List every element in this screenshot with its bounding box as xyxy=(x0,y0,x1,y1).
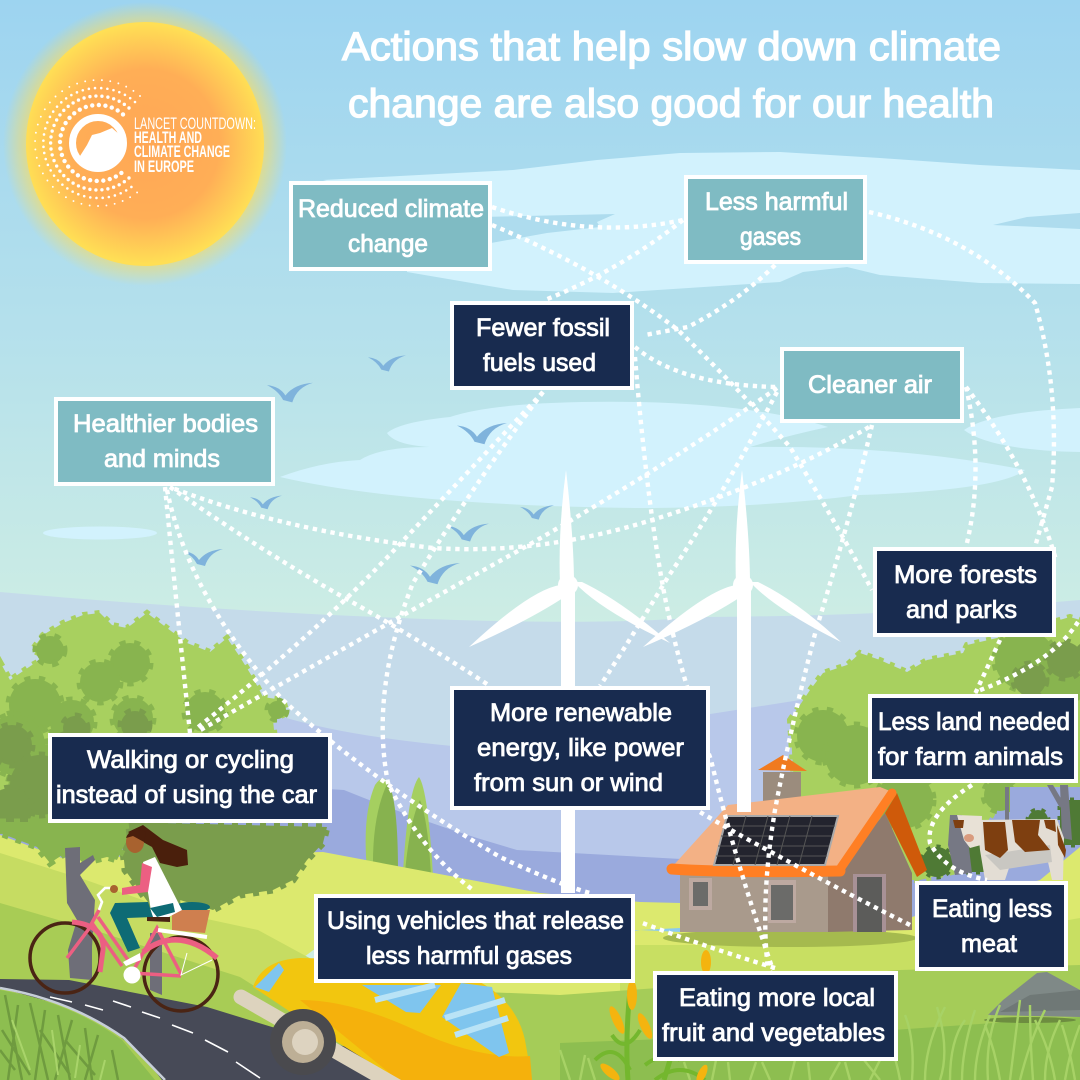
hills and fields xyxy=(0,835,1080,1080)
cypress trees xyxy=(366,777,433,876)
sky patches in the clouds xyxy=(480,213,1080,245)
box: Less harmful gases: Less harmful xyxy=(705,188,848,216)
logo text: CLIMATE CHANGE xyxy=(134,142,230,161)
basket xyxy=(158,902,210,937)
title xyxy=(342,25,1001,126)
wind turbine right xyxy=(643,470,841,812)
box: More renewable energy: More renewable xyxy=(490,699,672,727)
dotted connection network xyxy=(165,207,1078,970)
chimney xyxy=(758,755,807,805)
box: Eating less meat: meat xyxy=(961,930,1017,958)
bicycle xyxy=(30,888,218,1011)
box: Fewer fossil fuels used: fuels used xyxy=(483,349,596,377)
house xyxy=(663,755,927,947)
logo text xyxy=(134,114,256,176)
logo dot rings xyxy=(35,80,140,206)
box: Reduced climate change: Reduced climate xyxy=(298,195,484,223)
tree: right large xyxy=(790,617,1080,880)
box: Cleaner air: Cleaner air xyxy=(808,371,932,399)
box: Less land needed for farm animals: Less land needed xyxy=(878,708,1070,736)
box: Fewer fossil fuels used: Fewer fossil xyxy=(476,314,610,342)
sun xyxy=(3,2,287,286)
box: Less harmful gases xyxy=(686,177,865,262)
road xyxy=(0,979,470,1080)
logo text: IN EUROPE xyxy=(134,157,194,176)
box: Healthier bodies and minds: Healthier bodies xyxy=(73,410,258,438)
box: Less land needed for farm animals: for farm animals xyxy=(878,743,1063,771)
bottom right grass blades xyxy=(560,1000,1080,1080)
car wheel xyxy=(270,1009,336,1075)
box: Fewer fossil fuels used xyxy=(452,303,632,388)
logo text: LANCET COUNTDOWN: xyxy=(134,114,256,133)
car xyxy=(241,958,532,1080)
solar panel xyxy=(714,816,838,865)
box: Walking or cycling: instead of using the car xyxy=(56,781,317,809)
box: Eating less meat: Eating less xyxy=(932,895,1052,923)
box: Eating more local: Eating more local xyxy=(679,984,875,1012)
title: Actions that help slow down climate xyxy=(342,25,1001,69)
wind turbine left xyxy=(469,470,670,893)
title: change are also good for our health xyxy=(348,82,994,126)
tree trunks right xyxy=(948,785,1072,875)
box: Eating more local xyxy=(655,973,896,1059)
box: More forests and parks xyxy=(875,549,1054,635)
box: Less land needed for farm animals xyxy=(870,696,1076,781)
walls xyxy=(680,870,830,932)
box: Cleaner air xyxy=(782,349,962,421)
cow xyxy=(953,815,1066,880)
corn plant xyxy=(595,950,711,1080)
grass under the road xyxy=(0,990,155,1080)
distant mountains xyxy=(0,592,1080,920)
rock xyxy=(984,972,1080,1023)
box: Walking or cycling: Walking or cycling xyxy=(87,746,294,774)
box: Healthier bodies and minds: and minds xyxy=(104,445,220,473)
logo text: HEALTH AND xyxy=(134,128,202,147)
tree: behind the cyclist xyxy=(0,822,327,910)
tree: left large xyxy=(0,613,287,834)
box: More renewable energy xyxy=(452,688,708,808)
box: Eating more local: fruit and vegetables xyxy=(662,1019,885,1047)
box: Reduced climate change: change xyxy=(348,230,428,258)
box: Using vehicles: less harmful gases xyxy=(366,942,572,970)
box: Healthier bodies and minds xyxy=(56,399,273,484)
clouds xyxy=(43,152,1080,540)
car windows xyxy=(255,963,509,1057)
woman xyxy=(110,825,188,966)
box: Less harmful gases: gases xyxy=(740,223,801,251)
cyclist xyxy=(30,825,218,1011)
box: Eating less meat xyxy=(917,883,1066,969)
box: Using vehicles xyxy=(316,896,633,981)
box: More renewable energy: from sun or wind xyxy=(474,769,663,797)
windows and door xyxy=(689,874,886,932)
box: More forests and parks: and parks xyxy=(906,596,1017,624)
sky gap and shrubs behind cow xyxy=(922,787,1080,877)
box: More forests and parks: More forests xyxy=(894,561,1037,589)
flock of birds xyxy=(183,355,554,584)
water strip xyxy=(250,925,700,950)
left tree trunks xyxy=(65,847,162,995)
logo globe xyxy=(72,118,124,168)
car window highlights xyxy=(375,985,508,1035)
box: Reduced climate change xyxy=(291,183,490,269)
roof xyxy=(885,793,927,877)
box: Using vehicles: Using vehicles that release xyxy=(327,907,624,935)
logo: Lancet Countdown xyxy=(35,80,256,206)
box: More renewable energy: energy, like power xyxy=(477,734,684,762)
box: Walking or cycling xyxy=(50,735,330,821)
